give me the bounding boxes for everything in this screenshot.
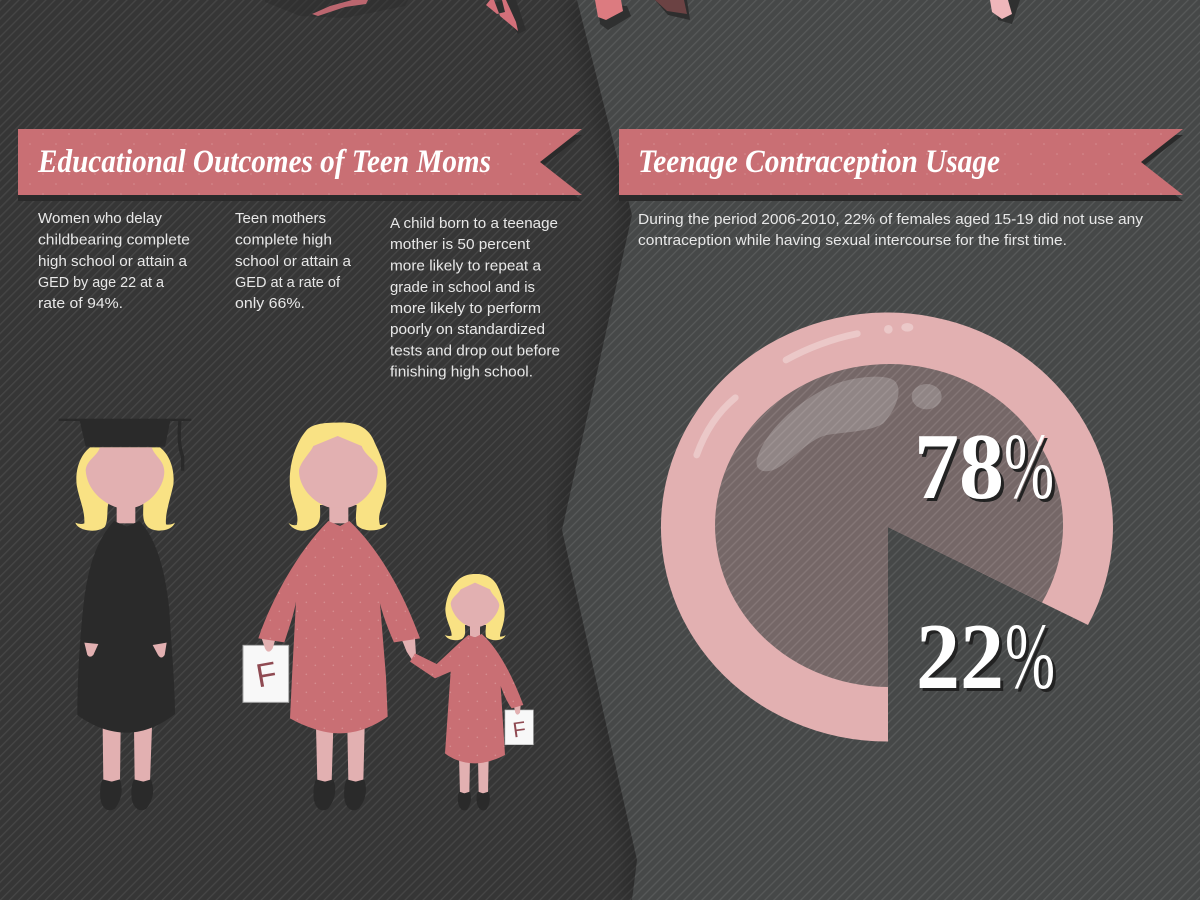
value 78%: 78: [914, 415, 1004, 519]
child paper: [505, 710, 533, 745]
cap tassel: [179, 420, 183, 471]
mother hair: [288, 423, 388, 531]
graduate legs: [103, 727, 152, 782]
background: left panel: [0, 0, 637, 900]
cap brim: [59, 419, 191, 421]
text: women who delay: rate of 94%.: [38, 296, 123, 312]
highlights on pie: [697, 323, 942, 471]
child legs: [459, 757, 489, 793]
graduate face: [86, 447, 164, 507]
panel: contraception usage: [619, 129, 1183, 742]
graduate gown: [77, 521, 175, 733]
graduate hands: [84, 643, 167, 657]
mother paper grade: F: [253, 655, 280, 695]
text: teen mothers: GED at a rate of: [235, 275, 341, 291]
graduate shoes: [100, 779, 153, 810]
graduate hair: [75, 447, 175, 531]
text: teen mothers: complete high: [235, 232, 332, 248]
text: child born to a teenage mother: A child born to a teenage: [390, 216, 558, 232]
mother shoes: [313, 779, 366, 810]
text: teen mothers: school or attain a: [235, 254, 352, 270]
text: teen mothers: only 66%.: [235, 296, 305, 312]
text: contraception statistic: contraception while having sexual intercourse for the first time.: [638, 233, 1067, 249]
child hair: [445, 574, 506, 640]
text: child born to a teenage mother: more likely to perform: [390, 301, 541, 317]
pie inner 78%: [715, 364, 1063, 687]
text: child born to a teenage mother: more likely to repeat a: [390, 258, 542, 274]
value 22%: %: [1005, 605, 1055, 709]
mother neck: [329, 505, 348, 523]
child face: [451, 583, 499, 627]
mother dress: [258, 521, 420, 733]
panel: educational outcomes: [18, 129, 582, 810]
child paper grade: F: [511, 717, 527, 742]
value 22%: 22: [916, 605, 1004, 709]
text: child born to a teenage mother: tests and drop out before: [390, 344, 560, 360]
mother legs: [316, 727, 365, 782]
banner: contraception usage: [619, 129, 1183, 201]
figure: graduate: [59, 419, 191, 810]
heading: contraception usage: Teenage Contraception Usage: [638, 144, 1000, 180]
figure: teen mother: [243, 423, 420, 810]
pie ring 78%: [661, 313, 1113, 742]
mother face: [299, 436, 378, 508]
child neck: [470, 623, 480, 637]
child hands: [514, 706, 521, 715]
text: teen mothers: Teen mothers: [235, 211, 326, 227]
mother paper: [243, 645, 289, 702]
text: women who delay: childbearing complete: [38, 232, 190, 248]
text: child born to a teenage mother: mother is 50 percent: [390, 237, 530, 253]
figure: child: [410, 574, 533, 810]
text: contraception statistic: During the period 2006-2010, 22% of females aged 15-19 did not use any: [638, 212, 1144, 228]
banner: educational outcomes: [18, 129, 582, 201]
child shoes: [458, 792, 490, 810]
graduate cap: [79, 419, 171, 447]
text: women who delay: high school or attain a: [38, 254, 188, 270]
text: child born to a teenage mother: finishing high school.: [390, 364, 533, 380]
text: child born to a teenage mother: poorly on standardized: [390, 322, 545, 338]
text: women who delay: Women who delay: [38, 211, 163, 227]
graduate neck: [117, 503, 135, 523]
child dress: [410, 634, 523, 763]
text: women who delay: GED by age 22 at a: [38, 275, 165, 291]
top illustration fragments: [265, 0, 1020, 34]
panel edge shading: [562, 0, 637, 900]
text: child born to a teenage mother: grade in school and is: [390, 280, 535, 296]
chart: contraception pie: [661, 313, 1113, 742]
value 78%: %: [1004, 415, 1054, 519]
heading: educational outcomes: Educational Outcomes of Teen Moms: [37, 144, 491, 180]
mother hands: [262, 638, 416, 659]
